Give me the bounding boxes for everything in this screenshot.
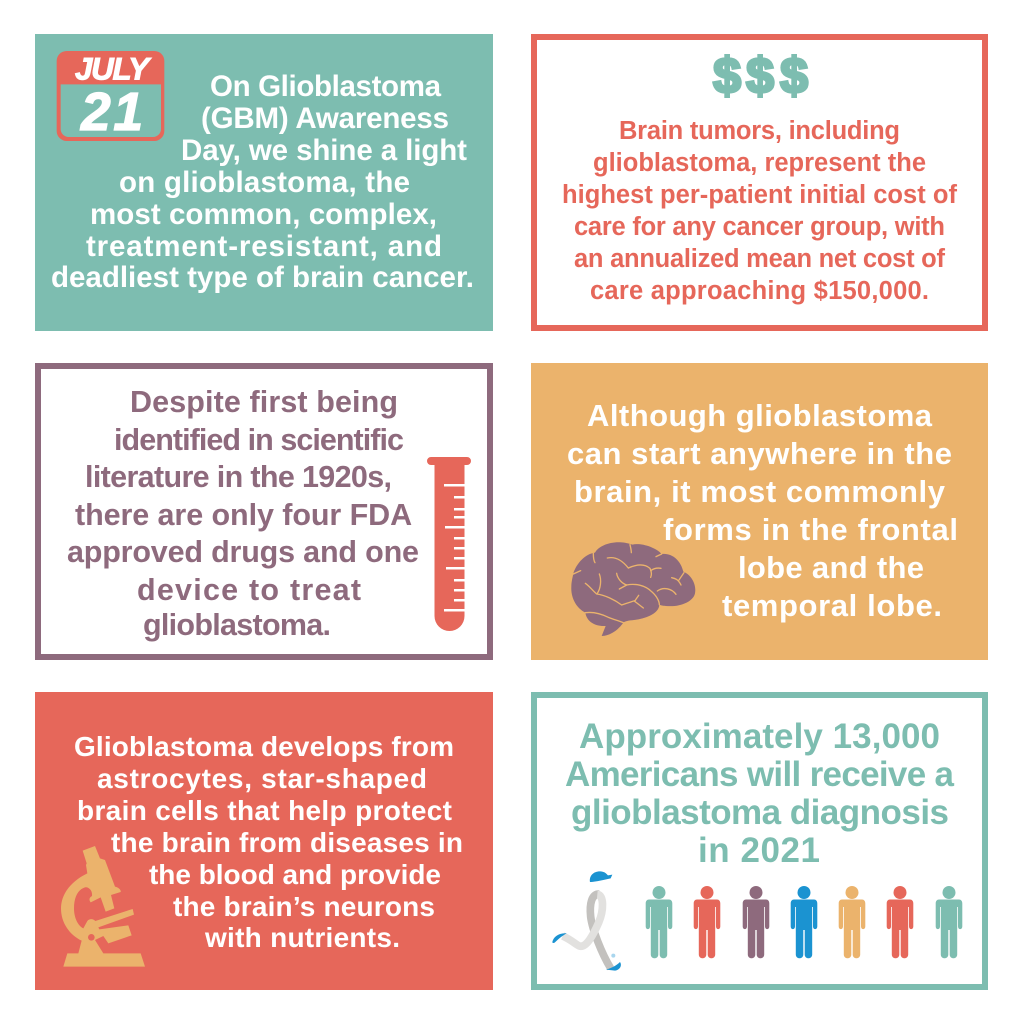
panel: FDA approved treatments [38,366,490,657]
icon: microscope [61,846,145,967]
panel: diagnosis count [534,695,985,987]
text: diagnosis statement: in 2021 [698,831,820,870]
icon: row of seven people [646,886,962,958]
text: treatments statement: device to treat [137,573,361,607]
text: treatments statement: Despite first being [130,385,398,419]
text: brain location statement: Although glioblastoma [587,398,933,433]
text: brain location statement: can start anywhere in the [567,436,952,471]
text: diagnosis statement: Approximately 13,000 [579,717,940,756]
text: astrocytes statement: astrocytes, star-shaped [97,763,427,794]
icon: three dollar signs: $ [746,48,774,104]
panel: cost of care [534,37,985,328]
text: treatments statement: identified in scientific [114,423,404,457]
icon: brain [571,542,695,636]
text: awareness day statement: deadliest type of brain cancer. [51,261,474,294]
text: awareness day statement: treatment-resistant, and [86,230,442,263]
text: cost of care statement: an annualized mean net cost of [574,245,946,273]
text: cost of care statement: highest per-patient initial cost of [562,181,958,209]
icon: three dollar signs [713,48,808,104]
icon: three dollar signs: $ [713,48,741,104]
icon: three dollar signs: $ [780,48,808,104]
panel: brain location [531,363,988,660]
text: treatments statement: literature in the 1920s, [85,460,392,494]
text: cost of care statement: Brain tumors, including [619,117,900,145]
icon: ribbon runner logo [552,871,621,971]
text: brain location statement: lobe and the [738,550,924,585]
text: astrocytes statement: Glioblastoma develops from [74,731,454,762]
text: treatments statement: approved drugs and one [67,535,419,569]
text: brain location statement: forms in the frontal [663,512,958,547]
text: brain location statement: temporal lobe. [722,588,942,623]
icon: calendar July 21: 21 [80,83,143,142]
panel: awareness day [35,34,493,331]
text: astrocytes statement: with nutrients. [204,922,400,953]
text: awareness day statement: on glioblastoma, the [119,166,410,199]
text: diagnosis statement: glioblastoma diagnosis [571,793,949,832]
text: astrocytes statement: the brain’s neurons [173,891,435,922]
text: awareness day statement: Day, we shine a light [181,134,467,167]
text: awareness day statement: most common, complex, [90,198,437,231]
text: cost of care statement: glioblastoma, represent the [593,149,926,177]
text: treatments statement: glioblastoma. [143,608,331,642]
text: treatments statement: there are only four FDA [75,498,412,532]
text: awareness day statement: On Glioblastoma [210,70,442,103]
text: brain location statement: brain, it most commonly [574,474,946,509]
text: astrocytes statement: the brain from diseases in [111,827,463,858]
text: astrocytes statement: the blood and provide [149,859,441,890]
panel: astrocytes [35,692,493,990]
text: awareness day statement: (GBM) Awareness [201,102,449,135]
text: astrocytes statement: brain cells that help protect [77,795,452,826]
icon: calendar July 21 [57,51,164,142]
text: cost of care statement: care approaching $150,000. [590,277,929,305]
text: cost of care statement: care for any cancer group, with [574,213,945,241]
icon: calendar July 21: JULY [75,51,152,86]
text: diagnosis statement: Americans will receive a [565,755,955,794]
icon: test tube [427,457,471,631]
